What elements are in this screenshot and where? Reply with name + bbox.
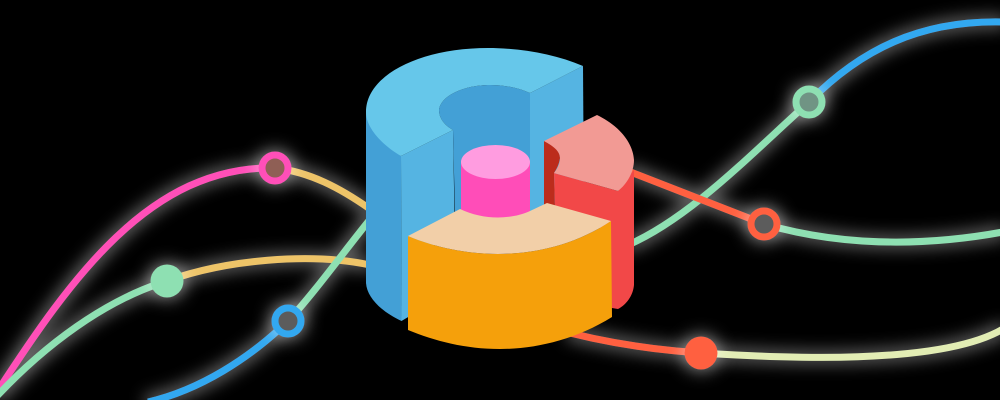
cylinder top [461, 145, 530, 179]
blue front cut face [401, 130, 455, 321]
line: orange bottom curve [570, 333, 701, 353]
line: yellow lower curve [167, 259, 370, 281]
line: orange diagonal [628, 171, 764, 224]
blue inner wall [439, 85, 530, 215]
line: blue top curve [809, 22, 1000, 102]
blue outer wall [366, 112, 402, 321]
orange body [408, 221, 612, 349]
red dark inner wall [544, 141, 560, 207]
node: green solid [150, 264, 184, 298]
blue rear cut face [530, 66, 584, 215]
line: yellow upper curve [275, 168, 370, 209]
blue ring segment [366, 48, 584, 321]
line: green left curve [0, 281, 167, 396]
red segment [544, 115, 634, 309]
line: green rising curve [288, 217, 372, 321]
line: green rising curve right [628, 102, 809, 245]
right connector lines [570, 22, 1000, 357]
red outer wall [554, 170, 634, 309]
red top face [544, 115, 634, 191]
orange top face [408, 203, 611, 254]
line: green middle curve [764, 224, 1000, 242]
node: orange solid [684, 336, 718, 370]
blue top face [366, 48, 583, 156]
line: pale yellow curve [701, 329, 1000, 357]
line: blue lower curve [148, 321, 288, 400]
node: green ring [796, 89, 822, 115]
node: blue ring [275, 308, 301, 334]
line: pink curve [0, 168, 275, 392]
orange segment [408, 203, 612, 349]
pink cylinder [461, 145, 530, 222]
node: orange ring [751, 211, 777, 237]
left connector lines [0, 168, 372, 400]
cylinder body [461, 162, 530, 222]
node: pink ring [262, 155, 288, 181]
